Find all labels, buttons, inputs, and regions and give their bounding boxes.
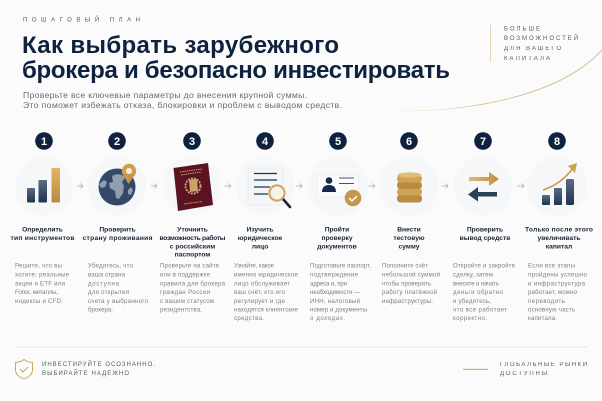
description: чтобы проверить xyxy=(382,280,431,287)
description: основную часть xyxy=(528,306,575,314)
description: брокера. xyxy=(88,306,113,314)
step 7 xyxy=(453,132,516,322)
title: брокера и безопасно инвестировать xyxy=(22,57,450,84)
step 7: 7 xyxy=(480,136,486,148)
step 3 xyxy=(160,132,226,314)
title: Как выбрать зарубежного xyxy=(22,32,339,59)
description: внесите и начать xyxy=(453,280,499,287)
description: переводить xyxy=(528,298,565,305)
footer message left: ВЫБИРАЙТЕ НАДЕЖНО xyxy=(42,369,129,377)
footer xyxy=(16,346,587,379)
description xyxy=(528,262,588,322)
title xyxy=(22,32,450,84)
heading xyxy=(238,226,283,250)
description: индексы и CFD. xyxy=(15,298,63,305)
decorative curve xyxy=(395,50,602,111)
subtitle: Это поможет избежать отказа, блокировки и проблем с выводом средств. xyxy=(23,100,342,110)
arrow xyxy=(296,184,302,188)
step 5 xyxy=(308,132,371,322)
description: акции и ETF или xyxy=(15,280,65,287)
description: деньги обратно xyxy=(453,289,504,296)
heading: страну проживания xyxy=(82,235,153,242)
description: Пополните счёт xyxy=(382,262,428,270)
arrow xyxy=(517,184,524,188)
footer message right xyxy=(500,362,587,377)
description: адреса и, при xyxy=(310,280,347,287)
arrow xyxy=(77,184,83,188)
heading: сумму xyxy=(399,244,420,250)
description: средства. xyxy=(234,315,264,322)
description xyxy=(382,262,440,305)
description: пройдены успешно xyxy=(528,272,588,278)
heading: лицо xyxy=(252,244,268,250)
side note: КАПИТАЛА xyxy=(504,56,550,62)
footer message right: ДОСТУПНЫ xyxy=(500,371,547,377)
description: что все работает xyxy=(453,306,507,314)
heading: Только после этого xyxy=(525,226,593,234)
heading: капитал xyxy=(546,244,572,250)
description: Если все этапы xyxy=(528,262,575,270)
description: подтверждение xyxy=(310,272,359,278)
description: Проверьте на сайте xyxy=(160,262,220,270)
heading: Определить xyxy=(22,226,63,234)
description: сделку, затем xyxy=(453,272,493,278)
heading xyxy=(393,226,425,250)
icon: growth chart xyxy=(542,163,577,205)
description xyxy=(88,262,149,314)
side note: ВОЗМОЖНОСТЕЙ xyxy=(504,34,578,42)
step 8 xyxy=(525,132,593,322)
description: Решите, что вы xyxy=(15,262,62,270)
step 6: 6 xyxy=(406,136,412,148)
footer message left: ИНВЕСТИРУЙТЕ ОСОЗНАННО. xyxy=(42,360,155,368)
icon: id card with check xyxy=(317,175,361,206)
description: ваша страна xyxy=(88,272,126,278)
subtitle: Проверьте все ключевые параметры до внесения крупной суммы. xyxy=(23,90,307,100)
description: для открытия xyxy=(88,289,129,296)
description: счета у выбранного xyxy=(88,298,149,305)
description xyxy=(453,262,516,322)
description: ИНН, налоговый xyxy=(310,298,360,305)
description: ваш счёт, кто его xyxy=(234,289,286,296)
heading: паспортом xyxy=(175,252,210,258)
icon: document with magnifier xyxy=(248,168,290,207)
step 6 xyxy=(379,132,440,305)
description: о доходах. xyxy=(310,315,345,322)
heading xyxy=(317,226,357,250)
heading: Внести xyxy=(397,226,421,234)
description: с вашим статусом xyxy=(160,298,214,305)
description xyxy=(310,262,371,322)
arrow xyxy=(368,184,375,188)
description: Откройте и закройте xyxy=(453,262,516,270)
description: капитала. xyxy=(528,315,557,322)
eyebrow label: ПОШАГОВЫЙ ПЛАН xyxy=(23,16,140,24)
heading: увеличивать xyxy=(538,235,580,242)
icon: coin stack xyxy=(397,172,422,202)
heading xyxy=(82,226,153,242)
heading: возможность работы xyxy=(160,234,226,242)
description: правила для брокера xyxy=(160,280,226,287)
description: доступна xyxy=(88,280,120,287)
arrow xyxy=(224,184,231,188)
heading: документов xyxy=(317,244,357,250)
step 4 xyxy=(234,132,299,322)
description: работает, можно xyxy=(528,289,578,296)
description: Узнайте, какое xyxy=(234,262,275,270)
header xyxy=(22,16,450,110)
step 2 xyxy=(82,132,153,314)
description: необходимости — xyxy=(310,289,361,296)
description: лицо обслуживает xyxy=(234,280,290,287)
heading xyxy=(10,226,74,242)
heading: Проверить xyxy=(99,226,136,234)
description xyxy=(160,262,226,314)
description: Forex, металлы, xyxy=(15,289,58,296)
description: граждан России xyxy=(160,289,210,296)
heading: юридическое xyxy=(238,235,283,242)
heading: Пройти xyxy=(325,226,349,234)
heading: Проверить xyxy=(467,226,503,234)
description: резидентства. xyxy=(160,306,202,314)
description: инфраструктуры. xyxy=(382,298,433,305)
step 2: 2 xyxy=(114,136,120,148)
description: и убедитесь, xyxy=(453,298,491,305)
subtitle xyxy=(23,90,342,110)
step 1 xyxy=(10,132,74,305)
heading: проверку xyxy=(321,235,353,242)
description xyxy=(15,262,70,305)
footer message right: ГЛОБАЛЬНЫЕ РЫНКИ xyxy=(500,362,587,368)
heading xyxy=(160,226,226,258)
side note: БОЛЬШЕ xyxy=(504,26,540,32)
footer message left xyxy=(42,360,155,377)
description: и инфраструктура xyxy=(528,280,586,287)
heading: вывод средств xyxy=(460,235,510,242)
icon: exchange arrows xyxy=(468,172,499,202)
heading xyxy=(525,226,593,250)
description: хотите: реальные xyxy=(15,272,70,278)
description: работу платёжной xyxy=(382,289,437,296)
step 1: 1 xyxy=(41,136,47,148)
side note xyxy=(490,25,578,62)
heading: Уточнить xyxy=(177,226,208,234)
side note: ДЛЯ ВАШЕГО xyxy=(504,46,561,52)
arrow xyxy=(151,184,157,188)
description: номер и документы xyxy=(310,306,367,314)
description: Подготовьте паспорт, xyxy=(310,262,371,270)
icon: globe with pin xyxy=(98,164,136,206)
step 3: 3 xyxy=(189,136,195,148)
description: небольшой суммой xyxy=(382,272,440,278)
step 5: 5 xyxy=(335,136,341,148)
heading xyxy=(460,226,510,242)
description: находятся клиентские xyxy=(234,306,299,314)
step 8: 8 xyxy=(554,136,560,148)
step 4: 4 xyxy=(262,136,269,148)
description: именно юридическое xyxy=(234,272,299,278)
heading: Изучить xyxy=(246,226,274,234)
description: корректно. xyxy=(453,315,487,322)
description: Убедитесь, что xyxy=(88,262,134,270)
heading: тестовую xyxy=(393,235,425,242)
icon: shield xyxy=(16,360,32,379)
icon: bars xyxy=(27,168,60,202)
description xyxy=(234,262,299,322)
heading: с российским xyxy=(170,242,215,250)
arrow xyxy=(442,184,448,188)
description: регулирует и где xyxy=(234,298,286,305)
heading: тип инструментов xyxy=(10,235,74,242)
icon: passport xyxy=(174,163,213,211)
description: или в поддержке xyxy=(160,272,211,278)
